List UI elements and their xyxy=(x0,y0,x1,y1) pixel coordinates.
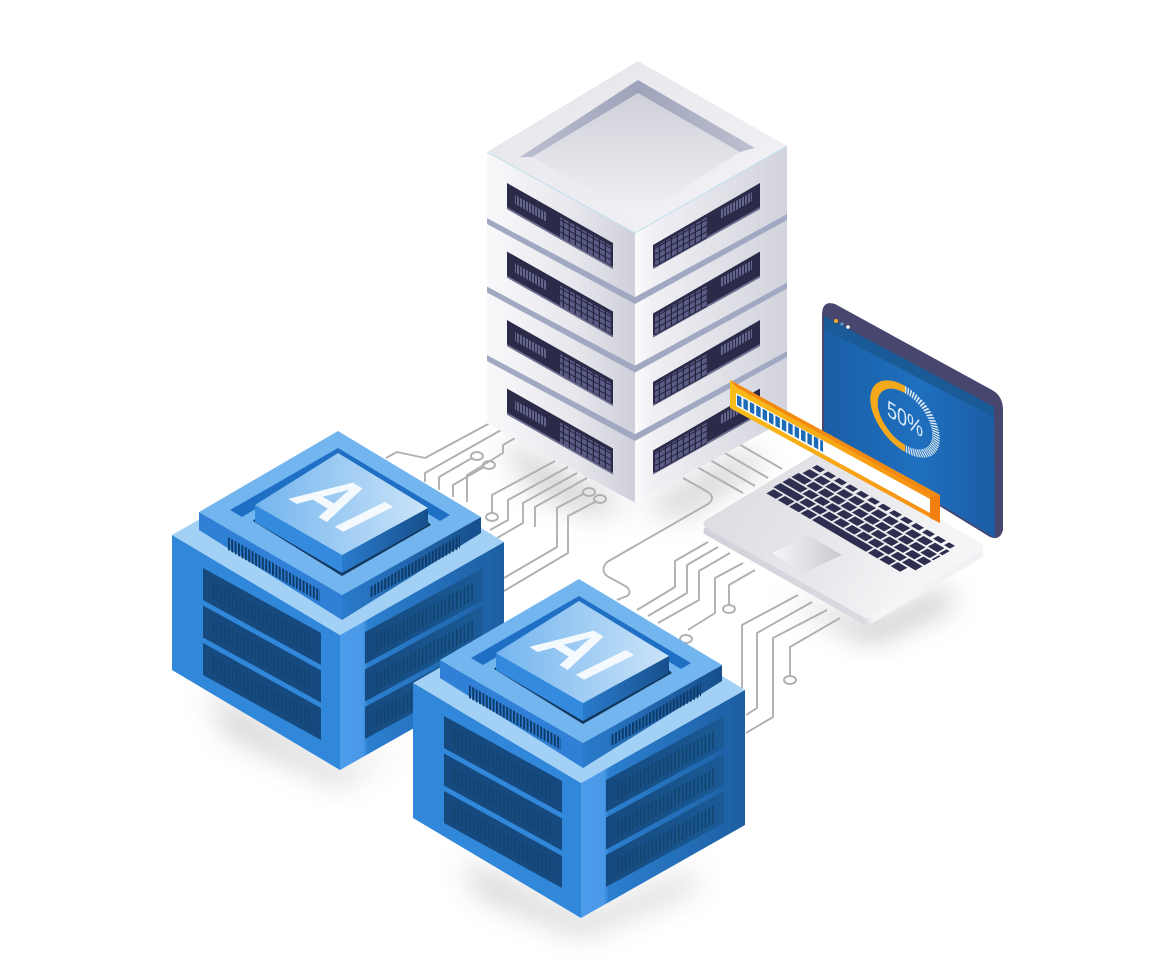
server unit 4 seam xyxy=(487,351,787,441)
block body with vent panels xyxy=(172,440,504,770)
server unit 2 seam xyxy=(487,214,787,304)
server tower xyxy=(487,61,787,502)
server unit 1 xyxy=(487,146,787,297)
shadows on the ground xyxy=(205,435,950,935)
block body with vent panels xyxy=(413,588,745,918)
laptop xyxy=(708,303,1003,621)
server unit 3 xyxy=(487,283,787,434)
laptop base xyxy=(708,456,979,621)
progress bar xyxy=(730,380,940,523)
circuit traces xyxy=(386,423,840,733)
server top xyxy=(487,61,787,233)
block upper tier xyxy=(199,431,481,620)
trackpad xyxy=(772,535,842,573)
laptop screen xyxy=(822,303,1003,538)
AI label: AI xyxy=(512,613,656,691)
server unit 2 xyxy=(487,214,787,366)
window dots xyxy=(834,319,850,329)
AI chip xyxy=(253,453,431,576)
AI chip xyxy=(494,601,672,724)
progress ring xyxy=(874,372,936,466)
server unit 3 seam xyxy=(487,282,787,372)
progress value 50%: 50% xyxy=(887,395,923,443)
keyboard xyxy=(768,465,954,573)
server unit 4 xyxy=(487,352,787,502)
AI label: AI xyxy=(271,465,415,543)
block upper tier xyxy=(440,579,722,768)
AI block front xyxy=(413,579,745,918)
AI block left xyxy=(172,431,504,770)
progress bar fill xyxy=(737,395,823,452)
